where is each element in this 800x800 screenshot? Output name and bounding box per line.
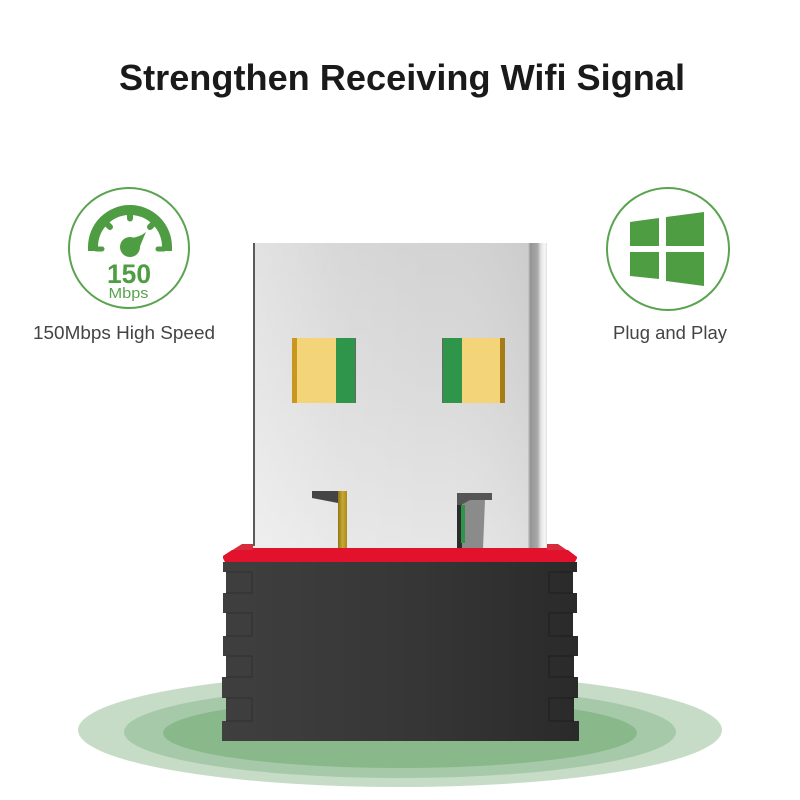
label: 150Mbps High Speed: 150Mbps High Speed (33, 322, 215, 343)
icon: speedometer 150 Mbps (69, 188, 189, 308)
red collar front band (223, 548, 577, 562)
left pin cutout (312, 491, 347, 549)
right pin cutout (457, 493, 492, 549)
usb wifi adapter (222, 243, 579, 741)
red collar top surface (223, 544, 577, 562)
black dongle housing (222, 562, 579, 741)
right contact slot (442, 338, 505, 403)
title: Strengthen Receiving Wifi Signal (119, 57, 685, 98)
feature: 150Mbps high speed (33, 188, 215, 343)
icon: speedometer 150 Mbps: Mbps (108, 286, 148, 302)
feature: plug and play (607, 188, 729, 343)
icon: windows logo (607, 188, 729, 310)
icon: speedometer 150 Mbps: 150 (107, 259, 151, 289)
left contact slot (292, 338, 356, 403)
usb metal connector (253, 243, 547, 548)
green signal ripple ellipses (78, 673, 722, 787)
label: Plug and Play: Plug and Play (613, 322, 728, 343)
